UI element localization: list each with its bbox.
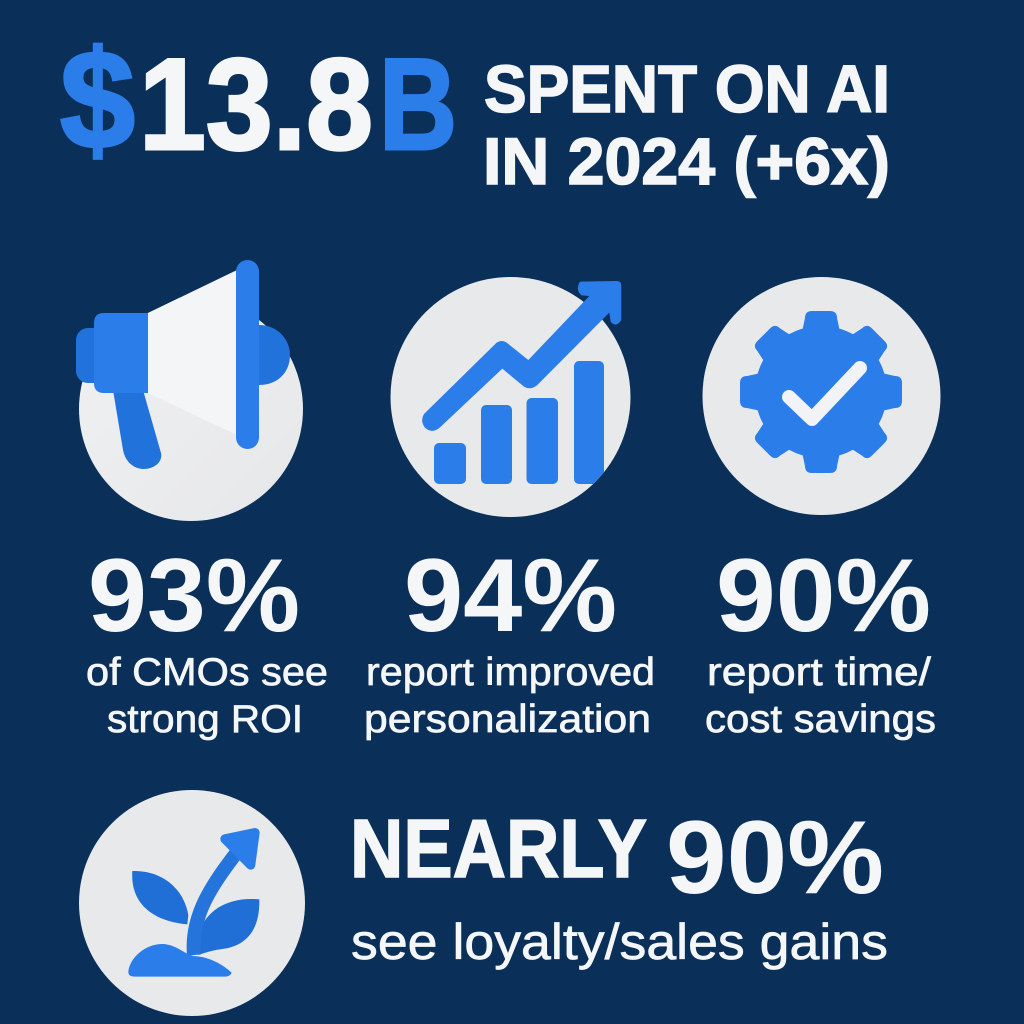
panel: personalization [364, 277, 655, 741]
caption: savings: report time/ [707, 651, 931, 694]
caption: personalization: report improved [366, 651, 655, 694]
icon: megaphone [76, 250, 303, 521]
caption: CMOs: of CMOs see [86, 651, 328, 694]
headline label: IN 2024 (+6x) [483, 124, 890, 198]
icon: gear with check [702, 277, 940, 515]
stat: 90%: 90% [716, 538, 931, 654]
panel: loyalty and sales [79, 790, 888, 1016]
caption: savings: cost savings [705, 698, 936, 741]
caption: savings [705, 651, 936, 741]
header: headline stat [60, 21, 890, 198]
headline label: SPENT ON AI [484, 52, 890, 127]
panel: time and cost savings [702, 277, 940, 741]
big number: $ [60, 21, 135, 178]
stat: nearly 90%: NEARLY [350, 802, 647, 895]
stat: 93%: 93% [88, 538, 300, 654]
caption: CMOs: strong ROI [107, 698, 303, 741]
icon: growth chart [390, 277, 630, 517]
stat: 94%: 94% [404, 538, 617, 654]
stat: nearly 90%: 90% [666, 800, 884, 916]
panel: CMO ROI [76, 250, 328, 741]
caption: CMOs [86, 651, 328, 741]
stat: nearly 90% [350, 800, 884, 916]
big number: B [379, 31, 457, 177]
big number [60, 21, 457, 178]
caption: personalization [364, 651, 655, 741]
big number: 13.8 [139, 31, 373, 177]
headline label [483, 52, 890, 198]
icon: sprout with arrow [79, 790, 305, 1016]
caption: loyalty: see loyalty/sales gains [351, 914, 888, 970]
caption: personalization: personalization [364, 698, 651, 741]
